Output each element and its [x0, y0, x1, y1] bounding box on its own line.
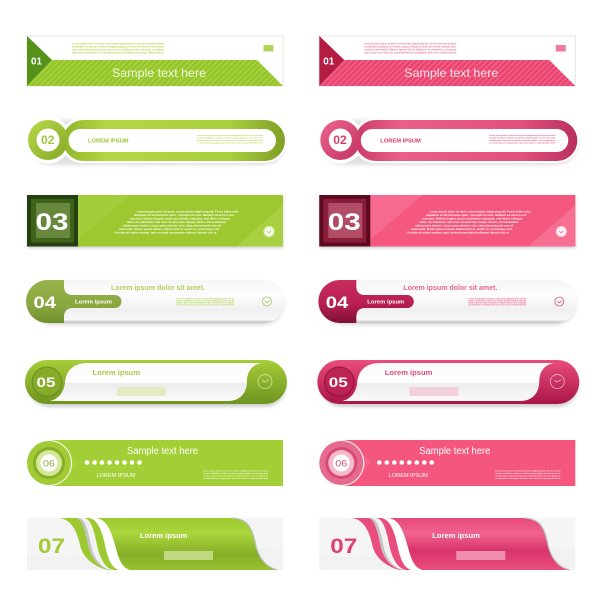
body text: Lorem ipsum dolor sit amet consectetur adipiscing elit sed do eiusmod tempor	[72, 42, 164, 46]
dark number block	[27, 195, 78, 246]
number 07: 07	[330, 535, 357, 558]
body text	[176, 298, 234, 306]
icon: clock	[258, 374, 272, 388]
icon: clock	[264, 226, 274, 237]
body text: veniam quis nostrud exercitation ullamco laboris nisi ut aliquip ex	[495, 474, 561, 478]
label: LOREM IPSUM	[88, 138, 128, 144]
heading: Lorem ipsum dolor sit amet.	[111, 283, 205, 292]
body text: duis aute irure dolor in reprehenderit in voluptate velit esse cillum dolore	[72, 52, 165, 54]
body text: incididunt ut labore et dolore magna aliqua ut enim ad minim veniam quis	[364, 46, 457, 48]
band	[27, 60, 283, 86]
dots	[85, 460, 142, 465]
label: LOREM IPSUM	[389, 473, 428, 479]
heading: Lorem ipsum	[140, 531, 188, 540]
panel 06 pink	[318, 440, 575, 486]
body text: tempor incididunt ut labore et dolore magna aliqua ut enim ad	[468, 300, 527, 302]
panel 03 pink	[319, 195, 575, 248]
shadow	[320, 120, 578, 165]
body text: dapibus id fermentum quis, suscipit id erat. Nullam ut arcu a est	[426, 214, 527, 217]
white inner	[342, 363, 554, 401]
body text: veniam quis nostrud exercitation ullamco laboris nisi ut aliquip ex	[203, 474, 269, 478]
pill	[63, 120, 285, 161]
body text	[203, 470, 269, 480]
body text: ea commodo consequat duis aute irure dolor in reprehenderit	[468, 304, 526, 306]
panel 04 green	[26, 280, 285, 325]
band	[319, 60, 575, 86]
body text: Lorem ipsum dolor sit amet consectetur adipiscing elit sed do eiusmod	[197, 134, 264, 137]
body text: Lorem ipsum dolor sit amet, consectetuer adipiscing elit. Fusce tellus odio,	[429, 210, 532, 214]
body text: tempor incididunt ut labore et dolore magna aliqua ut enim ad	[176, 300, 234, 302]
body text: Ut enim ad minim veniam, quis nostrud exercitation ullamco laboris nisi ut	[114, 232, 217, 234]
panel 01 green	[27, 36, 283, 86]
body text	[468, 298, 527, 306]
panel 03 green	[27, 195, 283, 248]
dark number block	[319, 195, 370, 246]
pattern block	[164, 551, 213, 560]
banner	[341, 440, 575, 486]
body text: ea commodo consequat duis aute irure dolor in reprehenderit velit	[495, 477, 561, 480]
pill	[25, 360, 287, 404]
body text	[72, 42, 165, 54]
number 04: 04	[34, 293, 57, 312]
body text: tempor incididunt ut labore et dolore magna aliqua ut enim ad minim	[203, 472, 268, 475]
badge with tab	[318, 280, 414, 323]
body text	[114, 210, 239, 234]
body text: duis aute irure dolor in reprehenderit in voluptate velit esse cillum dolore	[364, 52, 457, 54]
panel 04 pink	[318, 280, 577, 325]
panel 05 pink	[317, 360, 579, 407]
heading: Sample text here	[404, 66, 499, 80]
body text	[407, 210, 532, 234]
heading: Lorem ipsum	[432, 531, 480, 540]
body text: tempor incididunt ut labore et dolore magna aliqua ut enim ad minim	[495, 472, 560, 475]
pill	[317, 360, 579, 404]
green column	[24, 36, 287, 570]
icon: clock	[555, 297, 564, 306]
body text: nostrud exercitation ullamco laboris nisi ut aliquip ex ea commodo consequat	[364, 48, 457, 52]
number 02: 02	[333, 133, 347, 147]
heading: Sample text here	[112, 66, 206, 80]
label: LOREM IPSUM	[96, 473, 136, 479]
body text: veniam quis nostrud exercitation ullamco laboris nisi ut aliquip ex	[489, 139, 556, 142]
body text: veniam quis nostrud exercitation ullamco laboris nisi ut aliquip	[468, 302, 527, 304]
icon: clock	[262, 297, 272, 306]
body text: Lorem ipsum dolor sit amet consectetur adipiscing elit sed do eiusmod tempor	[364, 42, 456, 46]
body text: nostrud exercitation ullamco laboris nisi ut aliquip ex ea commodo consequat	[72, 48, 164, 52]
body text: euismod. Nullam feugiat, turpis at pulvinar vulputate, erat libero tristique	[130, 218, 231, 220]
number 06: 06	[335, 458, 347, 468]
panel 07 green	[27, 518, 283, 570]
number 01: 01	[323, 56, 334, 68]
body text: ullamcorper ultricies, lacus quam ultricies odio, vitae placerat pede sem sit	[415, 224, 513, 228]
pointed circle	[354, 444, 370, 482]
inner white	[68, 129, 276, 152]
pink column	[317, 36, 579, 570]
body text: ea commodo consequat duis aute irure dolor in reprehenderit velit	[489, 142, 556, 144]
body text: tempor incididunt ut labore et dolore magna aliqua ut enim ad minim	[489, 136, 555, 140]
white inner	[50, 363, 262, 401]
body text: Lorem ipsum dolor sit amet consectetur adipiscing elit sed do eiusmod	[489, 134, 556, 137]
number 04: 04	[326, 293, 349, 312]
body text: Lorem ipsum dolor sit amet consectetur adipiscing elit sed do	[468, 298, 527, 300]
white pill	[30, 280, 285, 323]
icon: clock	[550, 374, 564, 388]
badge with tab	[26, 280, 122, 323]
label: LOREM IPSUM	[380, 138, 421, 144]
main wave	[96, 518, 277, 570]
body text	[489, 134, 556, 144]
panel 02 green	[24, 116, 287, 165]
inner white	[361, 129, 568, 152]
heading: Sample text here	[127, 446, 198, 457]
number 05: 05	[329, 374, 348, 390]
main wave	[388, 518, 569, 570]
body text: ullamcorper ultricies, lacus quam ultricies odio, vitae placerat pede sem sit	[123, 224, 221, 228]
number 06: 06	[43, 458, 55, 468]
panel 01 pink	[319, 36, 575, 86]
number 05: 05	[36, 374, 56, 390]
body text: tellus, nec bibendum odio risus sit amet ante. Integer rutrum, orci vestibulum	[127, 221, 227, 224]
heading: Lorem ipsum dolor sit amet.	[403, 283, 497, 292]
number 01: 01	[31, 56, 42, 68]
body text	[495, 470, 561, 480]
heading: Lorem ipsum	[385, 368, 433, 377]
body text: amet enim. Donec ipsum massa, ullamcorper in, auctor et, scelerisque sed	[411, 228, 512, 231]
body text: Lorem ipsum dolor sit amet consectetur adipiscing elit sed do	[176, 298, 234, 300]
body text: ea commodo consequat duis aute irure dolor in reprehenderit velit	[197, 142, 263, 144]
banner	[49, 440, 283, 486]
body text	[364, 42, 457, 54]
circle	[28, 120, 68, 160]
panel 02 pink	[317, 116, 579, 165]
body text: Lorem ipsum dolor sit amet consectetur adipiscing elit sed do eiusmod	[495, 470, 561, 472]
body text: dapibus id fermentum quis, suscipit id erat. Nullam ut arcu a est	[134, 214, 234, 217]
body text: Lorem ipsum dolor sit amet consectetur adipiscing elit sed do eiusmod	[203, 470, 269, 472]
panel 05 green	[25, 360, 287, 407]
pattern block	[117, 387, 166, 396]
body text	[197, 134, 264, 144]
body text: euismod. Nullam feugiat, turpis at pulvinar vulputate, erat libero tristique	[422, 218, 523, 220]
heading: Lorem ipsum	[92, 368, 140, 377]
body text: veniam quis nostrud exercitation ullamco laboris nisi ut aliquip	[176, 302, 234, 304]
number circle	[32, 366, 62, 398]
tab label: Lorem ipsum	[75, 300, 112, 306]
pattern block	[409, 387, 458, 396]
triangle badge	[319, 36, 344, 86]
icon: envelope	[264, 45, 274, 52]
number 07: 07	[38, 535, 65, 558]
icon: envelope	[556, 45, 566, 52]
wave stripes	[58, 518, 140, 570]
tab label: Lorem ipsum	[367, 300, 404, 306]
heading: Sample text here	[419, 446, 491, 457]
pattern block	[456, 551, 505, 560]
body text: tempor incididunt ut labore et dolore magna aliqua ut enim ad minim	[197, 136, 263, 140]
panel 07 pink	[319, 518, 575, 570]
wave stripes	[350, 518, 432, 570]
body text: ea commodo consequat duis aute irure dolor in reprehenderit	[176, 304, 234, 306]
body text: Ut enim ad minim veniam, quis nostrud exercitation ullamco laboris nisi ut	[407, 232, 509, 234]
dots	[377, 460, 434, 465]
icon: clock	[556, 226, 567, 237]
number 02: 02	[41, 133, 55, 147]
shadow	[28, 120, 286, 165]
body text: veniam quis nostrud exercitation ullamco laboris nisi ut aliquip ex	[197, 139, 264, 142]
body text: Lorem ipsum dolor sit amet, consectetuer adipiscing elit. Fusce tellus odio,	[137, 210, 239, 214]
number circle	[324, 366, 355, 398]
body text: incididunt ut labore et dolore magna aliqua ut enim ad minim veniam quis	[72, 46, 165, 48]
body text: ea commodo consequat duis aute irure dolor in reprehenderit velit	[203, 477, 268, 480]
panel 06 green	[26, 440, 283, 486]
number 03: 03	[328, 209, 361, 236]
pill	[355, 120, 577, 161]
triangle badge	[27, 36, 52, 86]
body text: tellus, nec bibendum odio risus sit amet ante. Integer rutrum, orci vestibulum	[419, 221, 519, 224]
circle	[320, 120, 360, 160]
white pill	[322, 280, 577, 323]
pointed circle	[62, 444, 78, 482]
body text: amet enim. Donec ipsum massa, ullamcorper in, auctor et, scelerisque sed	[119, 228, 220, 231]
number 03: 03	[36, 209, 68, 236]
